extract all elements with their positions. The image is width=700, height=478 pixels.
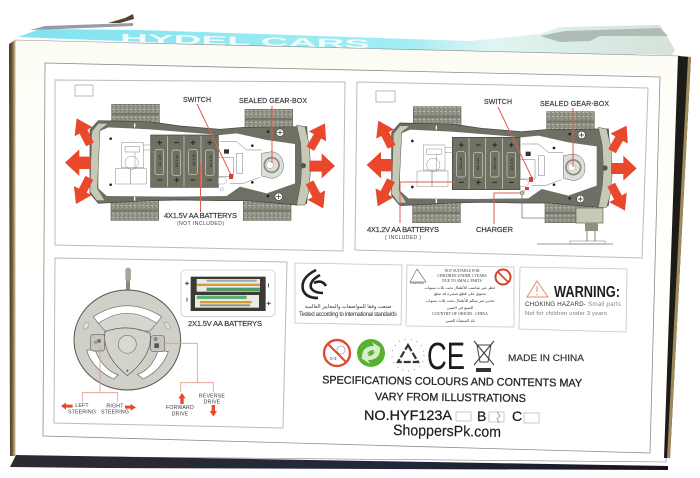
icon: not for ages 0-3 bbox=[324, 340, 350, 366]
arabic warning: بلد المنشأة الصين bbox=[445, 317, 475, 323]
control labels: DRIVE bbox=[204, 400, 221, 406]
certification icons row bbox=[324, 336, 584, 378]
age note: Not for children under 3 years bbox=[525, 311, 607, 317]
car chassis bbox=[392, 107, 612, 223]
battery markings bbox=[158, 154, 213, 167]
outer instruction frame bbox=[43, 63, 660, 453]
specification notice: SPECIFICATIONS COLOURS AND CONTENTS MAY bbox=[322, 374, 583, 390]
flap lettering: HYDEL CARS bbox=[120, 31, 370, 51]
arabic warning: يحتوي على قطع صغيرة قد تبتلع bbox=[434, 291, 486, 296]
leader lines bbox=[400, 107, 573, 224]
icon: green dot recycling bbox=[357, 339, 385, 367]
icon: no symbol bbox=[496, 270, 510, 284]
control labels bbox=[68, 394, 225, 418]
arabic warning: تحذير غير سالم للأطفال تحت ثلاث سنوات bbox=[425, 298, 495, 303]
panel: car with 4x1.5V batteries bbox=[55, 80, 345, 251]
model number line bbox=[364, 407, 539, 424]
battery markings: AA 1.5v bbox=[175, 155, 179, 167]
panel: choking hazard warning bbox=[519, 267, 627, 332]
panel: age warning multi-language bbox=[406, 265, 514, 327]
CE mark: CE bbox=[427, 336, 465, 378]
label: sealed gear-box: SEALED GEAR-BOX bbox=[540, 101, 609, 108]
label: batteries: 4X1.2V AA BATTERYS bbox=[367, 225, 439, 234]
battery markings: AA 1.5v bbox=[209, 155, 213, 167]
website: ShoppersPk.com bbox=[393, 422, 501, 441]
arabic statement: صنعت وفقا للمواصفات والمعايير العالمية bbox=[305, 304, 392, 310]
control labels: REVERSE bbox=[199, 394, 225, 400]
specification notice bbox=[322, 374, 583, 406]
label: charger: CHARGER bbox=[476, 225, 514, 234]
battery markings: AA 1.5v bbox=[459, 157, 463, 169]
icon: not for ages 0-3: 0-3 bbox=[330, 356, 337, 361]
battery markings bbox=[459, 157, 514, 170]
battery markings: AA 1.5v bbox=[158, 154, 162, 166]
control labels: FORWARD bbox=[166, 405, 194, 411]
steering wheel remote bbox=[74, 268, 181, 390]
label: remote batteries: 2X1.5V AA BATTERYS bbox=[188, 319, 262, 328]
direction arrows bbox=[65, 114, 335, 213]
icon: standards logo bbox=[303, 270, 326, 298]
charger plug bbox=[520, 191, 613, 244]
arabic warning: الصنع في الصين bbox=[447, 305, 473, 310]
arabic warning: خطر غير مناسب للأطفال تحت ثلاث سنوات bbox=[424, 285, 496, 290]
battery compartment illustration bbox=[181, 270, 275, 317]
label: switch: SWITCH bbox=[183, 97, 211, 104]
arabic warning bbox=[424, 285, 496, 323]
control labels: STEERING bbox=[68, 410, 96, 416]
made in china: MADE IN CHINA bbox=[508, 353, 584, 363]
specification notice: VARY FROM ILLUSTRATIONS bbox=[375, 391, 526, 405]
car chassis bbox=[90, 104, 311, 220]
english warning: CHILDREN UNDER 3 YEARS bbox=[437, 274, 487, 278]
label: included: ( INCLUDED ) bbox=[385, 235, 421, 241]
icon: recycling triangle bbox=[392, 339, 424, 371]
label: switch: SWITCH bbox=[484, 99, 512, 106]
english statement: Tested according to international standards bbox=[299, 312, 397, 318]
control labels: DRIVE bbox=[172, 412, 189, 418]
label: not included: (NOT INCLUDED) bbox=[177, 221, 224, 227]
bottom box edge bbox=[10, 455, 668, 470]
label: batteries: 4X1.5V AA BATTERYS bbox=[164, 211, 237, 220]
english warning: DUE TO SMALL PARTS bbox=[442, 279, 482, 283]
steering and drive arrows bbox=[61, 393, 217, 417]
battery markings: AA 1.5v bbox=[493, 157, 497, 169]
control labels: STEERING bbox=[101, 410, 129, 416]
model checkbox B bbox=[376, 91, 395, 102]
panel: standards certificate bbox=[295, 263, 402, 325]
control labels: LEFT bbox=[75, 403, 89, 409]
panel: car with 4x1.2V batteries and charger bbox=[355, 82, 648, 258]
english warning bbox=[437, 269, 487, 283]
panel: remote controller bbox=[54, 258, 287, 428]
warning heading: WARNING: bbox=[554, 284, 620, 301]
leader lines bbox=[197, 104, 272, 212]
model number line: NO.HYF123A bbox=[364, 407, 453, 423]
leader lines bbox=[82, 343, 213, 402]
battery markings: AA 1.5v bbox=[476, 158, 480, 170]
model checkbox A bbox=[75, 85, 93, 96]
model number line: C bbox=[512, 408, 522, 424]
label: sealed gear-box: SEALED GEAR-BOX bbox=[239, 98, 307, 105]
direction arrows bbox=[367, 116, 637, 215]
icon: warning triangle bbox=[527, 281, 548, 297]
left box edge bbox=[9, 40, 15, 456]
battery markings: AA 1.5v bbox=[510, 158, 514, 170]
control labels: RIGHT bbox=[106, 404, 124, 410]
english warning: NOT SUITABLE FOR bbox=[444, 269, 480, 273]
right box edge bbox=[664, 56, 691, 458]
box top flap band bbox=[18, 14, 675, 55]
battery markings: AA 1.5v bbox=[192, 154, 196, 166]
model number line: B bbox=[477, 408, 486, 424]
choking hazard text: CHOKING HAZARD- Small parts bbox=[525, 301, 621, 308]
arabic warning: COUNTRY OF ORIGIN : CHINA bbox=[432, 311, 488, 316]
icon: warning triangle: WARNING bbox=[410, 281, 425, 285]
icon: crossed wheelie bin bbox=[474, 341, 494, 372]
